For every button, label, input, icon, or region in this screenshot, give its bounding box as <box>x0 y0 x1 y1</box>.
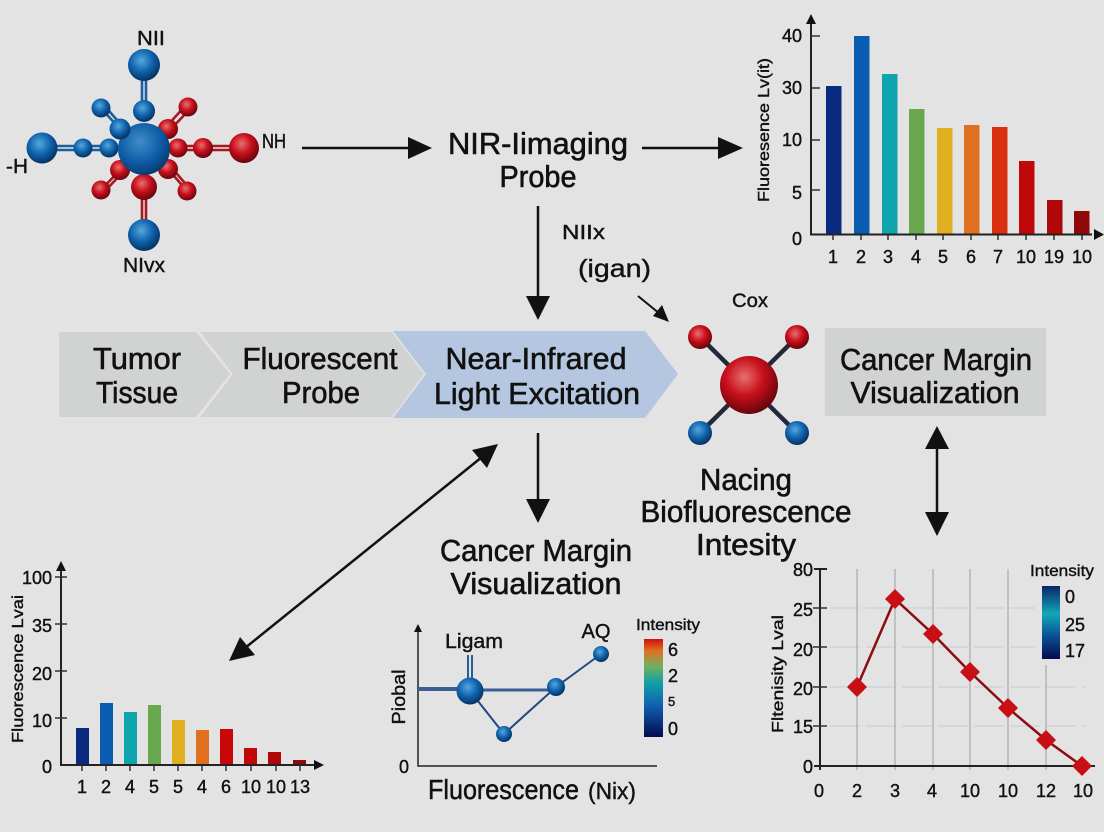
bar chart: top right fluorescence: 10 <box>782 130 802 150</box>
line chart: fluorescence intensity: 15 <box>793 717 813 737</box>
heading: cancer margin visualization center <box>440 533 632 601</box>
network chart: ligand probe: Ligam <box>445 631 503 653</box>
heading: cancer margin visualization center: Visualization <box>450 566 622 601</box>
legend: intensity colorbar center: 0 <box>668 719 678 739</box>
bar chart: bottom left fluorescence <box>10 561 324 797</box>
arrow: ligand to molecule <box>638 296 669 322</box>
process step: near-infrared light excitation: Near-Infrared <box>446 341 626 376</box>
network chart: ligand probe: 0 <box>399 757 409 777</box>
heading: NIR imaging probe: Probe <box>500 159 576 194</box>
bar chart: bottom left fluorescence: 20 <box>32 664 52 684</box>
bar chart: top right fluorescence: 30 <box>782 78 802 98</box>
line chart: fluorescence intensity: Fltenisity Lval <box>770 615 787 733</box>
icon: large probe molecule: NH <box>262 131 286 153</box>
bar chart: bottom left fluorescence: 4 <box>197 777 207 797</box>
line chart: fluorescence intensity: 0 <box>803 757 813 777</box>
icon: large probe molecule: -H <box>6 156 28 178</box>
heading: cancer margin visualization center: Cancer Margin <box>440 533 632 568</box>
icon: small molecule Cox <box>688 291 809 445</box>
bar chart: bottom left fluorescence: 10 <box>266 777 286 797</box>
legend: intensity colorbar right: Intensity <box>1030 563 1094 580</box>
heading: biofluorescence intensity: Nacing <box>700 462 792 497</box>
network chart: ligand probe: AQ <box>582 621 610 643</box>
bar chart: bottom left fluorescence: 10 <box>241 777 261 797</box>
legend: intensity colorbar center: 6 <box>668 640 678 660</box>
bar chart: top right fluorescence <box>756 14 1104 267</box>
network chart: ligand probe: (Nix) <box>588 778 636 804</box>
line chart: fluorescence intensity: 3 <box>890 781 900 801</box>
legend: intensity colorbar center <box>636 617 700 739</box>
arrow: molecule to NIR probe <box>302 137 432 159</box>
arrow: probe to top bar chart <box>642 137 743 159</box>
process step: fluorescent probe: Probe <box>282 375 360 410</box>
process step: tumor tissue: Tumor <box>93 341 181 376</box>
bar chart: bottom left fluorescence: 4 <box>125 777 135 797</box>
icon: large probe molecule: NIvx <box>123 255 165 277</box>
box: cancer margin visualization: Cancer Margin <box>840 342 1032 377</box>
line chart: fluorescence intensity: 4 <box>927 781 937 801</box>
process step: near-infrared light excitation: Light Excitation <box>434 376 640 411</box>
heading: NIR imaging probe <box>448 126 628 194</box>
bar chart: top right fluorescence: Fluoresence Lv(it) <box>756 58 773 202</box>
network chart: ligand probe: Piobal <box>389 670 409 724</box>
heading: biofluorescence intensity: Biofluorescence <box>640 494 852 529</box>
heading: NIR imaging probe: NIR-Iimaging <box>448 126 628 161</box>
line chart: fluorescence intensity: 12 <box>1036 781 1056 801</box>
bar chart: bottom left fluorescence: 10 <box>32 711 52 731</box>
label: NIIx (igan) <box>562 222 651 283</box>
process step: tumor tissue <box>59 332 230 417</box>
process step: tumor tissue: Tissue <box>96 375 178 410</box>
icon: large probe molecule: NII <box>137 28 165 50</box>
line chart: fluorescence intensity: 20 <box>793 640 813 660</box>
bar chart: bottom left fluorescence: 35 <box>32 616 52 636</box>
icon: small molecule Cox: Cox <box>732 291 769 312</box>
bar chart: top right fluorescence: 7 <box>993 247 1003 267</box>
legend: intensity colorbar right <box>1030 563 1094 661</box>
bar chart: top right fluorescence: 5 <box>938 247 948 267</box>
legend: intensity colorbar right: 25 <box>1065 615 1085 635</box>
legend: intensity colorbar center: Intensity <box>636 617 700 634</box>
bar chart: top right fluorescence: 10 <box>1072 247 1092 267</box>
line chart: fluorescence intensity: 20 <box>793 679 813 699</box>
process step: fluorescent probe: Fluorescent <box>242 341 398 376</box>
network chart: ligand probe <box>389 621 657 805</box>
heading: biofluorescence intensity: Intesity <box>696 527 796 562</box>
line chart: fluorescence intensity: 2 <box>852 781 862 801</box>
bar chart: top right fluorescence: 3 <box>883 247 893 267</box>
line chart: fluorescence intensity: 80 <box>793 560 813 580</box>
bar chart: bottom left fluorescence: 5 <box>149 777 159 797</box>
line chart: fluorescence intensity <box>770 560 1095 801</box>
bar chart: top right fluorescence: 2 <box>856 247 866 267</box>
process step: fluorescent probe <box>200 332 424 417</box>
bar chart: top right fluorescence: 19 <box>1044 247 1064 267</box>
bar chart: bottom left fluorescence: 1 <box>77 777 87 797</box>
network chart: ligand probe: Fluorescence <box>428 774 579 805</box>
bar chart: top right fluorescence: 5 <box>792 183 802 203</box>
legend: intensity colorbar right: 0 <box>1065 587 1075 607</box>
label: NIIx (igan): NIIx <box>562 222 605 244</box>
arrow: double vertical <box>925 426 949 536</box>
bar chart: bottom left fluorescence: Fluorescence Lvai <box>10 595 27 743</box>
bar chart: bottom left fluorescence: 6 <box>221 777 231 797</box>
line chart: fluorescence intensity: 0 <box>814 781 824 801</box>
bar chart: top right fluorescence: 6 <box>966 247 976 267</box>
legend: intensity colorbar right: 17 <box>1065 641 1085 661</box>
bar chart: top right fluorescence: 40 <box>782 26 802 46</box>
bar chart: bottom left fluorescence: 5 <box>173 777 183 797</box>
line chart: fluorescence intensity: 10 <box>998 781 1018 801</box>
line chart: fluorescence intensity: 25 <box>793 600 813 620</box>
heading: biofluorescence intensity <box>640 462 852 562</box>
bar chart: bottom left fluorescence: 100 <box>22 568 52 588</box>
bar chart: bottom left fluorescence: 0 <box>42 757 52 777</box>
bar chart: bottom left fluorescence: 13 <box>290 777 310 797</box>
process step: near-infrared light excitation <box>393 331 678 418</box>
bar chart: top right fluorescence: 1 <box>828 247 838 267</box>
bar chart: bottom left fluorescence: 2 <box>101 777 111 797</box>
arrow: probe down to banner <box>526 206 550 320</box>
line chart: fluorescence intensity: 10 <box>960 781 980 801</box>
bar chart: top right fluorescence: 10 <box>1016 247 1036 267</box>
label: NIIx (igan): (igan) <box>578 255 651 283</box>
icon: large probe molecule <box>6 28 286 277</box>
legend: intensity colorbar center: 2 <box>668 666 678 686</box>
line chart: fluorescence intensity: 10 <box>1073 781 1093 801</box>
bar chart: top right fluorescence: 4 <box>911 247 921 267</box>
bar chart: top right fluorescence: 0 <box>792 229 802 249</box>
arrow: banner down to margin visualization <box>526 433 550 523</box>
box: cancer margin visualization: Visualization <box>850 375 1020 410</box>
arrow: double diagonal <box>229 444 498 661</box>
box: cancer margin visualization <box>825 328 1046 416</box>
legend: intensity colorbar center: 5 <box>668 694 675 709</box>
